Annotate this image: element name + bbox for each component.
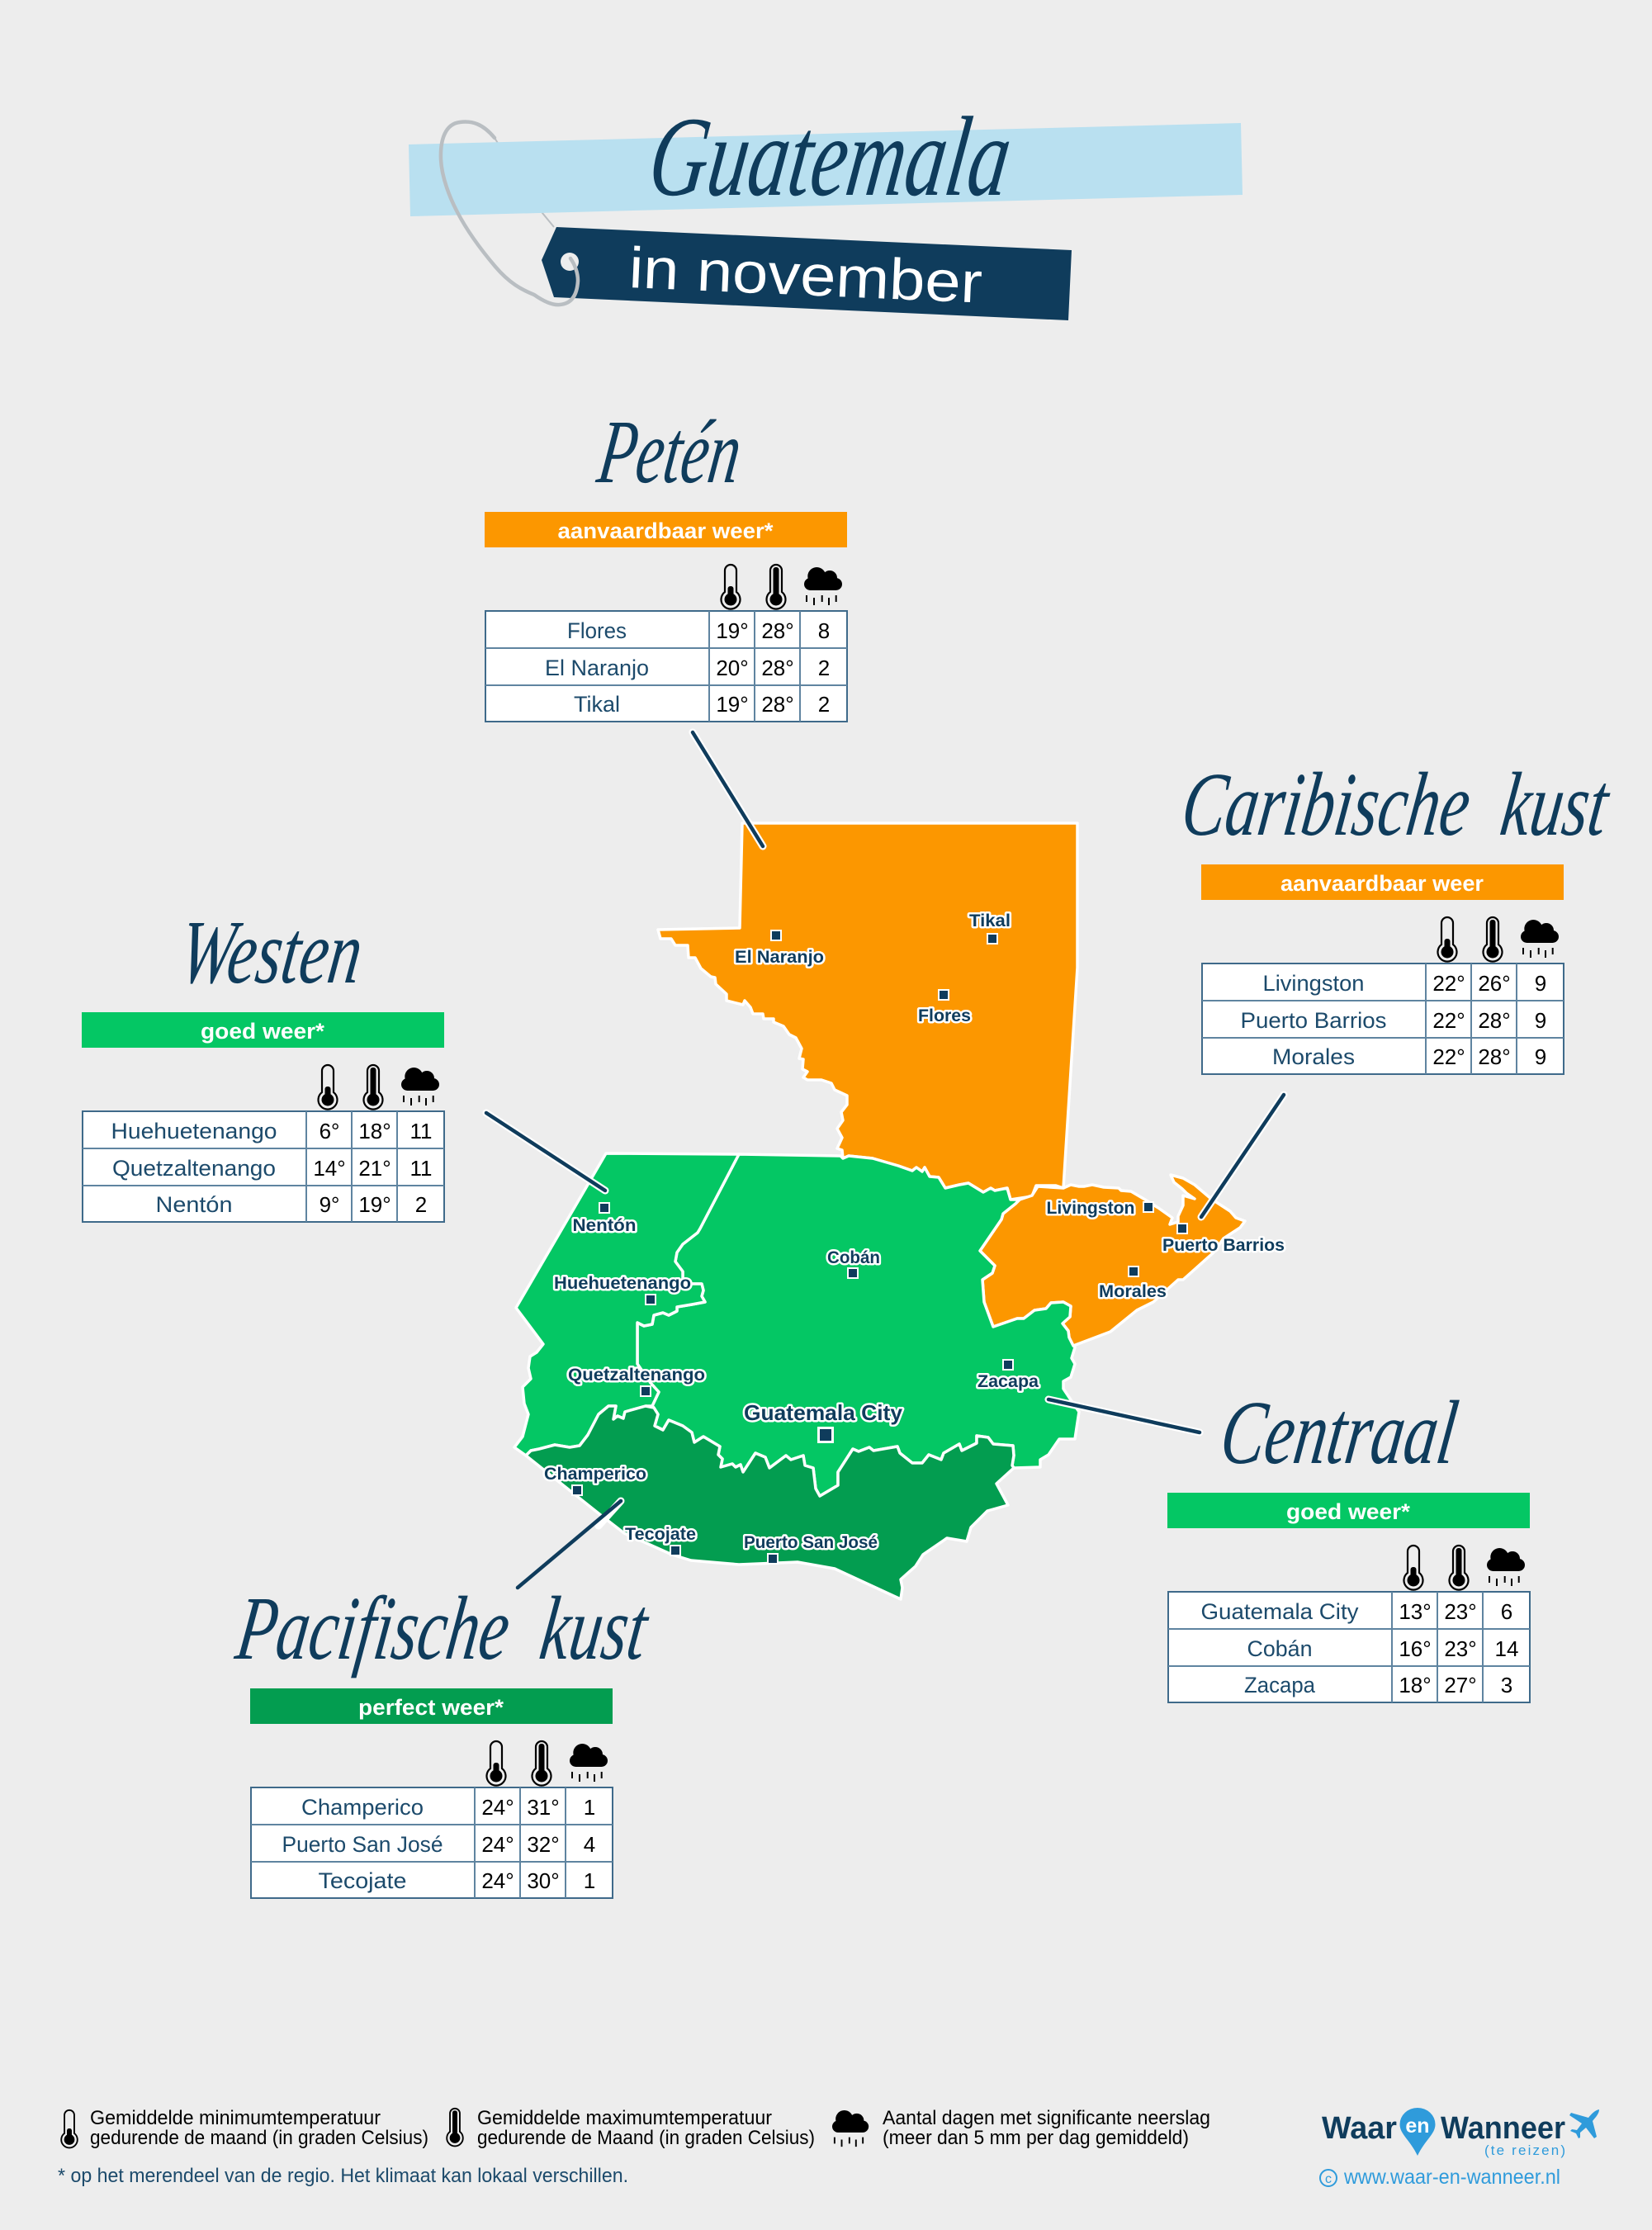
footnote: * op het merendeel van de regio. Het klimaat kan lokaal verschillen. [58, 2165, 628, 2187]
climate table: 9 [1535, 1044, 1546, 1069]
climate table: Guatemala City [1200, 1599, 1359, 1624]
climate table: Puerto San José [282, 1832, 443, 1857]
city: Puerto San José: Puerto San José [744, 1533, 878, 1552]
climate table: 27° [1444, 1673, 1477, 1697]
city: Tikal: Tikal [969, 911, 1011, 930]
climate table: Tikal [574, 692, 620, 717]
website: c [1325, 2172, 1332, 2186]
climate table: Zacapa [1244, 1673, 1316, 1697]
city: Zacapa: Zacapa [977, 1372, 1039, 1391]
climate table: 23° [1444, 1599, 1477, 1624]
climate table: 19° [716, 618, 749, 643]
climate table: 18° [1399, 1673, 1432, 1697]
leader line: Caribische kust [1201, 1095, 1284, 1217]
legend text: rain: (meer dan 5 mm per dag gemiddeld) [883, 2127, 1189, 2149]
legend text: min temperature: gedurende de maand (in graden Celsius) [90, 2127, 428, 2149]
climate table: 28° [761, 618, 794, 643]
climate table: 24° [481, 1832, 514, 1857]
legend text: min temperature [90, 2107, 428, 2149]
logo: Waar en Wanneer: Waar [1322, 2111, 1397, 2146]
logo: Waar en Wanneer: (te reizen) [1484, 2142, 1565, 2158]
climate table: 32° [527, 1832, 560, 1857]
climate table: 1 [584, 1795, 595, 1820]
icon: min temperature [319, 1065, 337, 1110]
climate table: 21° [358, 1156, 391, 1181]
climate table: 19° [716, 692, 749, 717]
icon: rain cloud [570, 1744, 608, 1782]
region: Centraal [637, 1154, 1079, 1496]
icon: map pin: en [1405, 2114, 1430, 2138]
icon: min temperature [1403, 1546, 1423, 1590]
climate table: Cobán [1247, 1636, 1313, 1661]
weather banner [485, 512, 847, 547]
climate table: 26° [1478, 971, 1511, 996]
city: Cobán [827, 1248, 880, 1279]
heading: Petén: Petén [592, 400, 748, 502]
climate table: Puerto Barrios [1240, 1008, 1387, 1033]
climate table: 28° [761, 692, 794, 717]
climate table: 22° [1432, 1008, 1465, 1033]
weather banner [250, 1688, 613, 1724]
logo: Waar en Wanneer: Wanneer [1441, 2111, 1565, 2146]
climate table: 9° [320, 1192, 339, 1217]
icon: max temperature [766, 565, 786, 609]
heading: Pacifische kust: Pacifische kust [230, 1577, 655, 1678]
icon: max temperature [363, 1065, 383, 1110]
climate table: 3 [1501, 1673, 1512, 1697]
city: Flores [918, 989, 971, 1025]
region: Caribische kust [980, 1175, 1245, 1346]
climate table: 24° [481, 1795, 514, 1820]
city: Guatemala City [744, 1400, 903, 1443]
city: Morales [1099, 1266, 1167, 1301]
website: www.waar-en-wanneer.nl [1343, 2166, 1560, 2189]
icon: rain cloud [1521, 920, 1559, 958]
climate table: 18° [358, 1119, 391, 1143]
climate table: Tecojate [319, 1868, 406, 1893]
climate table: Morales [1272, 1044, 1355, 1069]
logo: Waar en Wanneer [1322, 2108, 1599, 2158]
weather banner: aanvaardbaar weer [1280, 871, 1484, 896]
icon: min temperature [487, 1741, 505, 1786]
city: Quetzaltenango [568, 1366, 705, 1397]
tag string loop [441, 122, 578, 305]
icon: rain cloud [804, 567, 842, 605]
weather banner [1167, 1493, 1530, 1528]
climate table: 13° [1399, 1599, 1432, 1624]
city: Tikal [969, 911, 1011, 945]
tag string behind band [495, 138, 554, 227]
climate table [1168, 1592, 1530, 1702]
heading: Westen: Westen [174, 901, 369, 1002]
climate table: El Naranjo [545, 656, 649, 680]
weather banner: goed weer* [1286, 1499, 1411, 1524]
climate table: 16° [1399, 1636, 1432, 1661]
city: Tecojate: Tecojate [625, 1525, 696, 1544]
city: Morales: Morales [1099, 1282, 1167, 1301]
climate table: Livingston [1263, 971, 1364, 996]
city: Puerto Barrios: Puerto Barrios [1162, 1236, 1285, 1255]
climate table: 11 [409, 1156, 433, 1181]
climate table: 2 [818, 692, 830, 717]
climate table: 20° [716, 656, 749, 680]
icon: legend rain cloud [832, 2110, 869, 2147]
climate table: 28° [761, 656, 794, 680]
legend [58, 2107, 1210, 2187]
city: Quetzaltenango: Quetzaltenango [568, 1366, 705, 1385]
climate table: Champerico [301, 1795, 424, 1820]
city: Nentón [573, 1202, 636, 1235]
map of Guatemala [486, 732, 1285, 1599]
climate table: 22° [1432, 1044, 1465, 1069]
region: Petén [658, 823, 1077, 1200]
icon: max temperature [1483, 917, 1503, 962]
climate table: Flores [567, 618, 627, 643]
panel: Caribische kust [1176, 753, 1616, 1074]
climate table: 31° [527, 1795, 560, 1820]
icon: legend min temperature [61, 2110, 78, 2147]
weather banner [1201, 864, 1564, 900]
city: Tecojate [625, 1525, 696, 1556]
city: Cobán: Cobán [827, 1248, 880, 1267]
city: El Naranjo [735, 930, 824, 967]
icon: max temperature [1450, 1546, 1468, 1590]
icon: legend max temperature [447, 2109, 463, 2146]
leader line: Westen [486, 1113, 605, 1191]
city: Flores: Flores [918, 1006, 971, 1025]
title band [409, 123, 1243, 216]
leader line: Petén [693, 732, 763, 846]
city: Huehuetenango [554, 1274, 691, 1305]
city: Huehuetenango: Huehuetenango [554, 1274, 691, 1293]
climate table: 14 [1495, 1636, 1518, 1661]
climate table: 24° [481, 1868, 514, 1893]
climate table: 19° [358, 1192, 391, 1217]
panel: Pacifische kust [230, 1577, 655, 1898]
region: Pacifische kust [526, 1406, 1014, 1599]
panel: Petén [485, 400, 847, 722]
climate table: 14° [313, 1156, 346, 1181]
climate table: 6 [1501, 1599, 1512, 1624]
weather banner: perfect weer* [358, 1695, 504, 1720]
legend text: min temperature: Gemiddelde minimumtemperatuur [90, 2107, 381, 2129]
city: El Naranjo: El Naranjo [735, 948, 824, 967]
climate table: 9 [1535, 971, 1546, 996]
city: Champerico: Champerico [544, 1465, 646, 1484]
icon: min temperature [722, 565, 740, 609]
climate table: 22° [1432, 971, 1465, 996]
panel: Westen [82, 901, 444, 1222]
climate table: Quetzaltenango [112, 1156, 276, 1181]
climate table: 28° [1478, 1044, 1511, 1069]
climate table: Huehuetenango [111, 1119, 277, 1143]
climate table: 2 [818, 656, 830, 680]
climate table: 9 [1535, 1008, 1546, 1033]
climate table: 28° [1478, 1008, 1511, 1033]
city: Nentón: Nentón [573, 1216, 636, 1235]
tag: in november: in november [627, 235, 983, 315]
weather banner [82, 1012, 444, 1048]
leader line: Pacifische kust [518, 1501, 621, 1588]
climate table: 4 [584, 1832, 595, 1857]
city: Guatemala City: Guatemala City [744, 1400, 903, 1425]
climate table: Nentón [155, 1192, 233, 1217]
legend text: max temperature: gedurende de Maand (in graden Celsius) [477, 2127, 815, 2149]
icon: min temperature [1438, 917, 1456, 962]
region: Westen [514, 1153, 739, 1456]
climate table: 6° [320, 1119, 339, 1143]
climate table [83, 1111, 444, 1222]
climate table: 30° [527, 1868, 560, 1893]
climate table: 23° [1444, 1636, 1477, 1661]
city: Livingston: Livingston [1047, 1199, 1134, 1218]
heading: Centraal: Centraal [1215, 1381, 1464, 1483]
leader line: Centraal [1048, 1399, 1200, 1432]
city: Puerto Barrios [1162, 1223, 1285, 1255]
climate table [485, 611, 847, 722]
climate table: 1 [584, 1868, 595, 1893]
climate table: 8 [818, 618, 830, 643]
title: Guatemala: Guatemala [642, 93, 1019, 220]
climate table [1202, 963, 1564, 1074]
icon: max temperature [532, 1741, 551, 1786]
climate table: 2 [415, 1192, 427, 1217]
icon: plane [1569, 2109, 1599, 2138]
tag: in november [542, 227, 1072, 320]
icon: map pin [1400, 2108, 1435, 2156]
icon: rain cloud [401, 1068, 439, 1106]
climate table [251, 1787, 613, 1898]
legend text: max temperature: Gemiddelde maximumtemperatuur [477, 2107, 772, 2129]
weather banner: aanvaardbaar weer* [558, 518, 774, 543]
weather banner: goed weer* [201, 1019, 325, 1044]
city: Champerico [544, 1465, 646, 1496]
icon: rain cloud [1487, 1548, 1525, 1586]
climate table: 11 [409, 1119, 433, 1143]
panel: Centraal [1167, 1381, 1530, 1702]
legend text: rain: Aantal dagen met significante neerslag [883, 2107, 1210, 2129]
legend text: rain [883, 2107, 1210, 2149]
city: Puerto San José [744, 1533, 878, 1565]
city: Zacapa [977, 1359, 1039, 1391]
legend text: max temperature [477, 2107, 815, 2149]
